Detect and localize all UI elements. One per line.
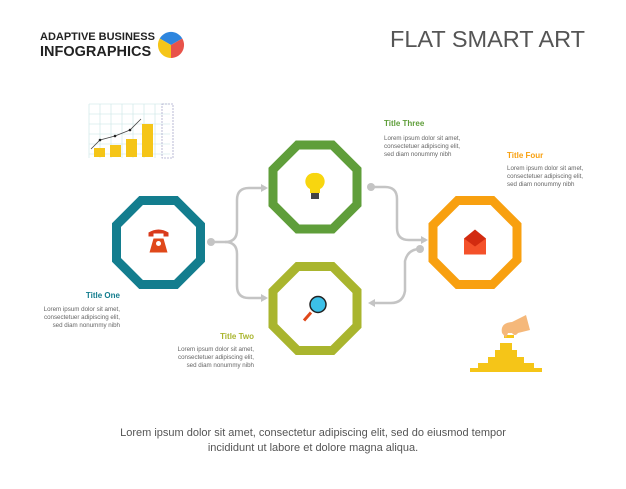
- text: title two: consectetuer adipiscing elit,: [178, 354, 254, 361]
- title: FLAT SMART ART: [390, 26, 585, 52]
- text: title four: sed diam nonummy nibh: [507, 181, 574, 188]
- text: title two: Title Two: [220, 332, 254, 341]
- logo text: INFOGRAPHICS: [40, 44, 151, 60]
- text: title three: consectetuer adipiscing elit,: [384, 143, 460, 150]
- logo text: [40, 31, 155, 60]
- octagon: four: [433, 200, 517, 284]
- logo: [40, 31, 184, 60]
- icon: envelope: [464, 230, 486, 254]
- text: title one: Title One: [86, 291, 120, 300]
- text: title one: consectetuer adipiscing elit,: [44, 314, 120, 321]
- footer text: incididunt ut labore et dolore magna aliqua.: [208, 442, 418, 454]
- text: title three: sed diam nonummy nibh: [384, 151, 451, 158]
- text: title three: [384, 119, 460, 158]
- text: title four: consectetuer adipiscing elit,: [507, 173, 583, 180]
- octagon: three: [273, 145, 357, 229]
- text: title one: sed diam nonummy nibh: [53, 322, 120, 329]
- text: title four: [507, 151, 583, 188]
- icon: phone: [148, 230, 168, 252]
- logo text: ADAPTIVE BUSINESS: [40, 31, 155, 43]
- text: title two: Lorem ipsum dolor sit amet,: [178, 346, 254, 353]
- footer text: Lorem ipsum dolor sit amet, consectetur adipiscing elit, sed do eiusmod tempor: [120, 427, 506, 439]
- octagon: two: [273, 266, 357, 350]
- text: title one: [44, 291, 120, 329]
- icon: bulb: [305, 173, 325, 199]
- icon: magnifier: [304, 296, 326, 320]
- text: title one: Lorem ipsum dolor sit amet,: [44, 306, 120, 313]
- text: title four: Lorem ipsum dolor sit amet,: [507, 165, 583, 172]
- icon: chart: [89, 104, 173, 158]
- text: title three: Title Three: [384, 119, 424, 128]
- text: title four: Title Four: [507, 151, 543, 160]
- icon: pie: [158, 32, 184, 58]
- text: title three: Lorem ipsum dolor sit amet,: [384, 135, 460, 142]
- text: title two: [178, 332, 254, 369]
- arrows: connectors: [211, 187, 426, 303]
- icon: hand coins: [470, 315, 542, 372]
- footer text: [120, 427, 506, 454]
- text: title two: sed diam nonummy nibh: [187, 362, 254, 369]
- octagon: one: [116, 200, 200, 284]
